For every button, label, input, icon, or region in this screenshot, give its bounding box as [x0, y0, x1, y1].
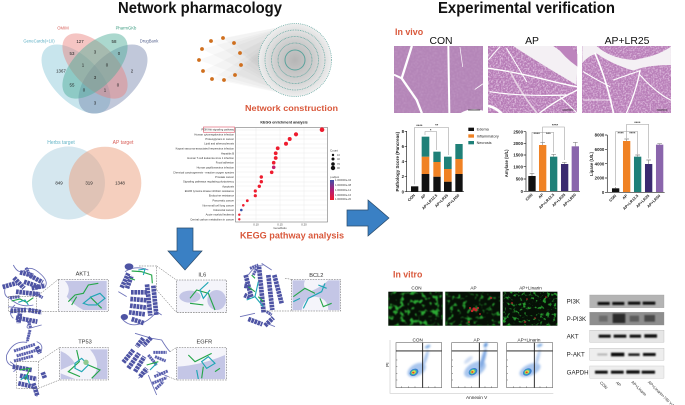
bar chart: amylase: AP+LR12.5 [538, 192, 556, 210]
heading: In vitro: In vitro [393, 270, 423, 280]
two-set Venn diagram: Herbs target and AP target: AP target [113, 140, 134, 146]
bar chart: amylase: **** [552, 123, 559, 128]
flow cytometry plots with axes: AP [474, 338, 480, 343]
fluorescence panel labels [411, 286, 542, 290]
four-set Venn diagram: 58 [112, 39, 117, 44]
KEGG enrichment dot plot: 10 [337, 153, 340, 157]
stacked bar chart: pathology score: Pathology Score (Pancreas) [395, 131, 400, 191]
KEGG enrichment dot plot: Acute myeloid leukemia [206, 213, 234, 217]
KEGG enrichment dot plot: Non-small cell lung cancer [202, 203, 234, 207]
histology panel: CON [394, 46, 483, 113]
bar chart: lipase: CON [609, 194, 618, 203]
flow cytometry plots with axes: PI [385, 362, 390, 367]
four-set Venn diagram: 1 [104, 88, 107, 92]
bar chart: lipase: 4000 [595, 161, 605, 166]
flow cytometry plots with axes: CON [412, 338, 423, 343]
four-set Venn diagram: 3 [94, 75, 97, 80]
bar chart: amylase: 0 [521, 189, 524, 194]
fluorescence panel labels: AP [470, 286, 477, 290]
docking: AKT1 [3, 265, 108, 397]
four-set Venn diagram: GeneCards(>10) [23, 38, 55, 44]
bar chart: amylase: **** [534, 131, 540, 136]
bar chart: lipase: 2000 [595, 176, 605, 181]
stacked bar chart: pathology score: 2 [402, 174, 405, 179]
four-set Venn diagram: 3 [94, 50, 97, 54]
bar chart: amylase: AP [538, 193, 545, 199]
four-set Venn diagram: OMIM [57, 26, 69, 30]
bar chart: lipase: 8000 [595, 133, 605, 138]
stacked bar chart: pathology score: * [430, 127, 432, 132]
bar chart: amylase: 1000 [513, 164, 524, 169]
KEGG enrichment dot plot: 70 [337, 162, 340, 166]
KEGG enrichment dot plot [173, 120, 352, 230]
KEGG enrichment dot plot: 40 [337, 157, 340, 161]
four-set Venn diagram: 2 [131, 68, 134, 74]
bar chart: amylase: 2000 [513, 141, 524, 146]
bar chart: amylase: 500 [516, 177, 524, 182]
bar chart: amylase: AP+LR25 [552, 192, 567, 208]
four-set Venn diagram: PharmGKb [116, 26, 137, 30]
docking: BCL2 [240, 263, 291, 327]
four-set Venn diagram: DrugBank [140, 38, 159, 44]
heading: KEGG pathway analysis: KEGG pathway analysis [240, 230, 344, 242]
western blot panel: CON [599, 380, 609, 390]
docking: IL6: EGFR [196, 340, 212, 346]
column labels for histology [429, 36, 650, 47]
KEGG enrichment dot plot: Prostate cancer [215, 175, 234, 179]
KEGG enrichment dot plot: Chemical carcinogenesis - reactive oxygen species [173, 170, 235, 174]
KEGG enrichment dot plot: Proteoglycans in cancer [205, 137, 234, 141]
four-set Venn diagram: 0 [83, 88, 86, 92]
bar chart: amylase [504, 123, 580, 210]
bar chart: amylase: Amylase (U/L) [504, 149, 509, 177]
KEGG enrichment dot plot: KEGG enrichment analysis [260, 120, 308, 124]
KEGG enrichment dot plot: Human papillomavirus infection [197, 165, 234, 169]
flow cytometry plots with axes: Annexin V [466, 395, 488, 400]
KEGG enrichment dot plot: Colorectal cancer [213, 208, 234, 212]
western blot panel: AP+Linarin [630, 379, 648, 397]
stacked bar chart: pathology score: CON [407, 193, 416, 202]
stacked bar chart: pathology score: AP+LR50 [446, 194, 460, 208]
western blot panel: GAPDH [567, 369, 589, 376]
fluorescence image: AP [445, 292, 500, 326]
stacked bar chart: pathology score: 8 [402, 129, 405, 134]
KEGG enrichment dot plot: 1.000000e-16 [335, 193, 352, 197]
fluorescence panel labels: CON [411, 286, 422, 290]
column labels for histology: AP+LR25 [605, 36, 650, 47]
KEGG enrichment dot plot: Signaling pathways regulating pluripotency [183, 180, 235, 184]
title: Experimental verification: Experimental verification [438, 0, 615, 17]
KEGG enrichment dot plot: 1.000000e-08 [335, 183, 352, 187]
KEGG enrichment dot plot: Central carbon metabolism in cancer [190, 217, 234, 221]
stacked bar chart: pathology score: ** [435, 123, 439, 128]
bar chart: amylase: *** [546, 131, 551, 136]
western blot panel: PI3K [567, 299, 581, 306]
stacked bar chart: pathology score: 0 [402, 189, 405, 194]
flow cytometry plots with axes [385, 338, 553, 400]
stacked bar chart: pathology score: Necrosis [477, 141, 492, 145]
heading: In vivo: In vivo [395, 27, 424, 37]
KEGG enrichment dot plot: Count [330, 148, 338, 152]
stacked bar chart: pathology score: AP+LR25 [434, 193, 450, 208]
stacked bar chart: pathology score: Edema [477, 128, 490, 132]
KEGG enrichment dot plot: Apoptosis [222, 184, 235, 188]
histology panel: AP [488, 46, 577, 113]
KEGG enrichment dot plot: Human T-cell leukemia virus 1 infection [187, 156, 235, 160]
stacked bar chart: pathology score: **** [416, 123, 423, 128]
bar chart: lipase: AP [622, 194, 629, 200]
stacked bar chart: pathology score: 6 [402, 144, 405, 149]
two-set Venn diagram: Herbs target and AP target [32, 140, 141, 220]
docking: IL6: BCL2 [309, 273, 323, 279]
docking: IL6: IL6 [198, 272, 206, 278]
docking: AKT1: TP53 [78, 340, 92, 346]
stacked bar chart: pathology score [395, 123, 499, 211]
four-set Venn diagram: 0 [117, 82, 120, 88]
two-set Venn diagram: Herbs target and AP target: Herbs target [47, 140, 75, 146]
western blot panel: P-AKT [567, 351, 585, 358]
KEGG enrichment dot plot: 0.20 [301, 222, 307, 226]
bar chart: amylase: AP+LR50 [562, 193, 577, 208]
KEGG enrichment dot plot: 0.15 [277, 222, 283, 226]
docking: AKT1: AKT1 [76, 271, 90, 277]
bar chart: lipase: Lipase (U/L) [589, 151, 594, 176]
four-set Venn diagram: 127 [76, 39, 84, 44]
KEGG enrichment dot plot: Human cytomegalovirus infection [194, 132, 234, 136]
KEGG enrichment dot plot: Focal adhesion [216, 161, 234, 165]
docking: IL6 [118, 263, 341, 395]
fluorescence image: CON [388, 292, 443, 326]
column labels for histology: CON [429, 36, 453, 47]
four-set Venn diagram: 0 [106, 62, 109, 68]
bar chart: lipase: 6000 [595, 147, 605, 152]
two-set Venn diagram: Herbs target and AP target: 319 [85, 180, 93, 186]
network graph: herbs linked to target rings [197, 24, 332, 96]
heading: Network construction: Network construction [245, 104, 338, 113]
four-set Venn diagram: 55 [70, 82, 75, 88]
western blot panel: AKT [567, 334, 579, 341]
KEGG enrichment dot plot: GeneRatio [273, 226, 287, 230]
KEGG enrichment dot plot: 1.000000e-12 [335, 188, 352, 192]
western blot panel [567, 295, 676, 405]
bar chart: amylase: 1500 [513, 153, 524, 158]
four-set Venn diagram: 1 [82, 62, 85, 68]
KEGG enrichment dot plot: 90 [337, 166, 340, 170]
bar chart: lipase: **** [634, 120, 641, 125]
four-set Venn diagram: 1367 [56, 68, 66, 74]
four-set Venn diagram [23, 22, 160, 126]
bar chart: lipase: 0 [602, 190, 605, 195]
KEGG enrichment dot plot: p.adjust [330, 175, 339, 179]
KEGG enrichment dot plot: 1.000000e-20 [335, 197, 352, 201]
KEGG enrichment dot plot: Kaposi sarcoma-associated herpesvirus infection [176, 146, 234, 150]
KEGG enrichment dot plot: Endocrine resistance [209, 194, 234, 198]
bar chart: lipase: AP+LR12.5 [622, 193, 640, 211]
two-set Venn diagram: Herbs target and AP target: 849 [55, 180, 63, 186]
bar chart: lipase: AP+LR50 [647, 194, 661, 209]
histology panel: AP+LR25 [582, 46, 671, 113]
KEGG enrichment dot plot: PI3K/Akt signaling pathway [201, 128, 235, 132]
bar chart: amylase: 2500 [513, 129, 524, 134]
KEGG enrichment dot plot: 1.000000e-04 [335, 178, 352, 182]
fluorescence panel labels: AP+Linarin [519, 286, 542, 290]
docking: EGFR [123, 333, 176, 395]
stacked bar chart: pathology score: AP+LR12.5 [421, 193, 439, 211]
flow cytometry plots with axes: AP+Linarin [518, 338, 541, 343]
western blot panel: P-PI3K [567, 316, 587, 323]
four-set Venn diagram: 0 [118, 51, 121, 56]
bar chart: lipase: **** [618, 130, 624, 135]
western blot panel: AP [615, 380, 622, 388]
bar chart: lipase: **** [629, 130, 636, 135]
KEGG enrichment dot plot: 0.10 [253, 222, 259, 226]
docking: TP53 [6, 330, 59, 397]
stacked bar chart: pathology score: 4 [402, 159, 405, 164]
bar chart: lipase [589, 120, 665, 211]
column labels for histology: AP [525, 36, 539, 47]
fluorescence image: AP+Linarin [503, 292, 557, 326]
KEGG enrichment dot plot: EGFR tyrosine kinase inhibitor resistance [185, 189, 234, 193]
two-set Venn diagram: Herbs target and AP target: 1348 [115, 180, 125, 186]
stacked bar chart: pathology score: AP [420, 193, 427, 200]
KEGG enrichment dot plot: Hepatitis B [221, 151, 234, 155]
KEGG enrichment dot plot: Lipid and atherosclerosis [204, 142, 235, 146]
arrow: down to docking results [168, 228, 202, 270]
arrow: right to experimental verification [347, 200, 389, 236]
KEGG enrichment dot plot: Pancreatic cancer [212, 199, 234, 203]
four-set Venn diagram: 53 [70, 51, 75, 56]
title: Network pharmacology: Network pharmacology [118, 0, 282, 17]
bar chart: amylase: CON [525, 193, 534, 202]
bar chart: lipase: AP+LR25 [636, 193, 651, 209]
stacked bar chart: pathology score: Inflammatory [477, 134, 499, 138]
four-set Venn diagram: 3 [94, 100, 97, 106]
